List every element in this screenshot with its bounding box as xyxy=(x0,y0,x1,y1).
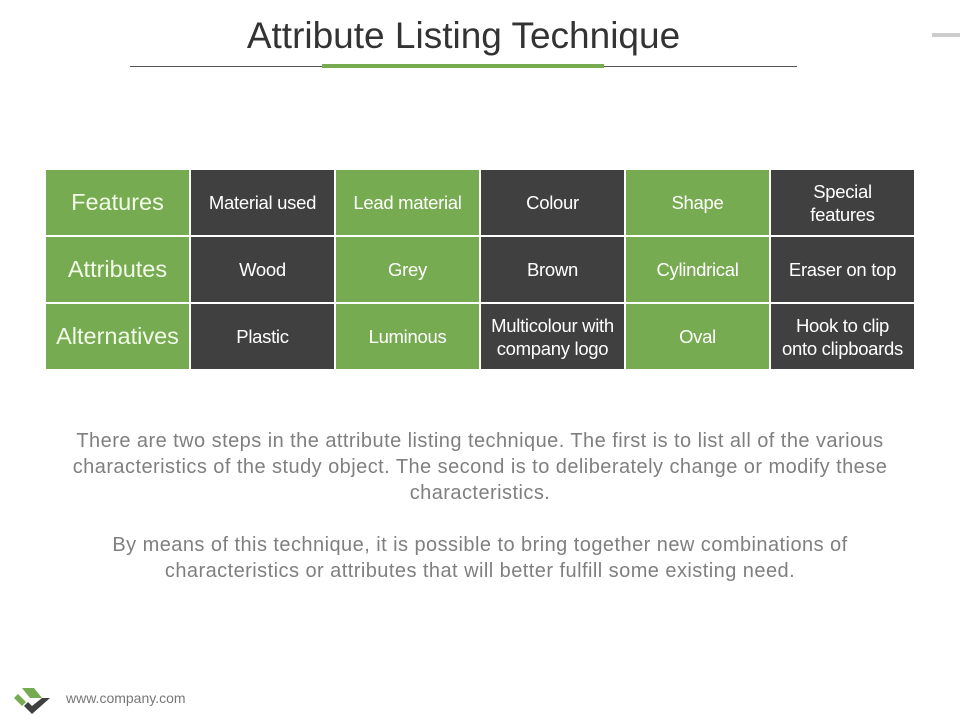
logo xyxy=(14,688,50,714)
attribute table: features xyxy=(810,204,875,224)
attribute table: Attributes xyxy=(68,256,167,282)
paragraph 1: characteristics of the study object. The second is to deliberately change or modify these xyxy=(73,456,887,478)
attribute table: Lead material xyxy=(353,192,462,213)
attribute table: Material used xyxy=(209,192,316,213)
attribute table: Grey xyxy=(388,259,427,280)
attribute table: Brown xyxy=(527,259,578,280)
title underline xyxy=(130,66,797,67)
attribute table: Alternatives xyxy=(56,323,179,349)
paragraph 2 xyxy=(112,534,848,582)
paragraph 1: There are two steps in the attribute listing technique. The first is to list all of the various xyxy=(76,430,884,452)
attribute table: company logo xyxy=(497,338,608,358)
corner mark xyxy=(932,33,960,37)
green accent xyxy=(322,64,604,68)
attribute table: Eraser on top xyxy=(789,259,896,280)
attribute table: Oval xyxy=(679,326,716,347)
footer url: www.company.com xyxy=(66,690,186,706)
attribute table: Features xyxy=(71,189,164,215)
attribute table: Cylindrical xyxy=(656,259,739,280)
paragraph 1 xyxy=(73,430,887,504)
attribute table: Colour xyxy=(526,192,579,213)
paragraph 2: By means of this technique, it is possible to bring together new combinations of xyxy=(112,534,848,556)
attribute table: onto clipboards xyxy=(782,338,903,358)
attribute table: Special xyxy=(813,180,872,202)
attribute table: Luminous xyxy=(369,326,446,347)
attribute table: Multicolour with xyxy=(491,314,614,336)
attribute table: Hook to clip xyxy=(796,314,889,336)
attribute table xyxy=(46,170,914,369)
attribute table: Shape xyxy=(672,192,724,213)
paragraph 1: characteristics. xyxy=(410,482,550,504)
attribute table: Wood xyxy=(239,259,286,280)
attribute table: Plastic xyxy=(236,326,289,347)
paragraph 2: characteristics or attributes that will better fulfill some existing need. xyxy=(165,560,795,582)
title: Attribute Listing Technique xyxy=(247,15,680,56)
